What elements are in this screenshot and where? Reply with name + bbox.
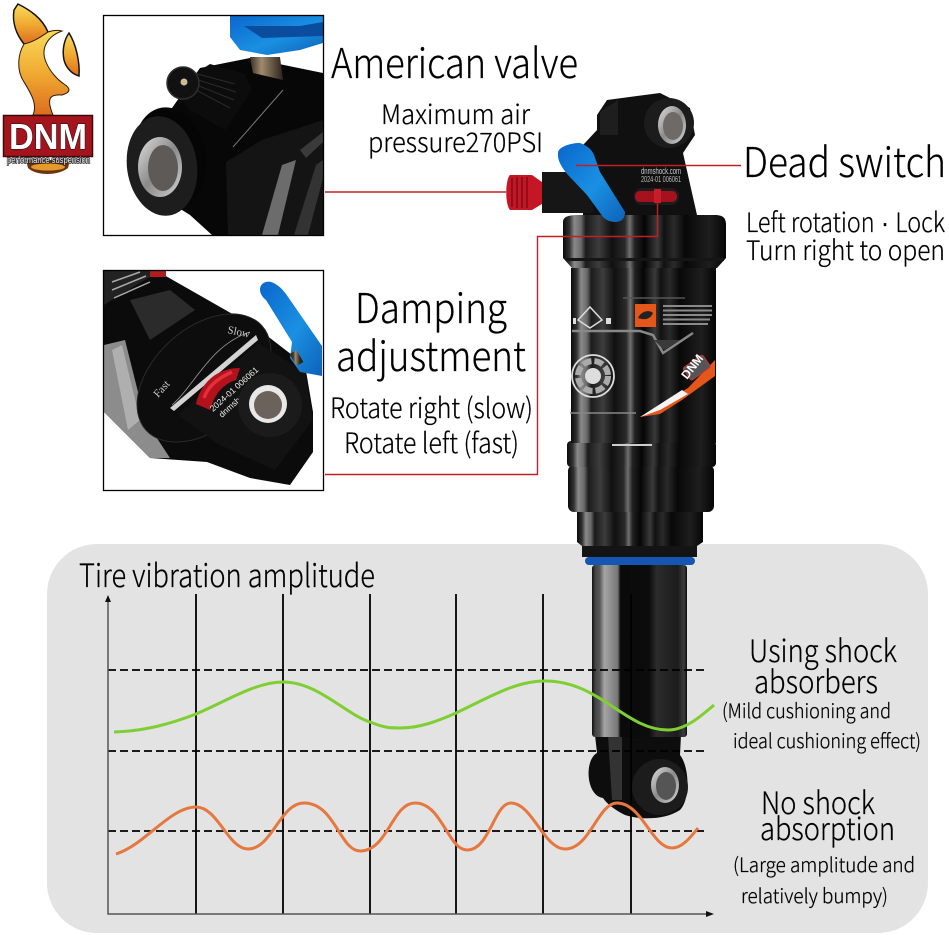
label graphics on can: DNM [678,352,706,382]
line: with shock absorbers [114,681,714,732]
panel: damping adjustment photo: Fast [151,378,173,400]
chart grid lines [108,594,707,914]
text: damping directions: Rotate left (fast) [344,422,519,462]
heading: no shock absorption [760,778,895,849]
text: mild cushioning: (Mild cushioning and [722,695,891,724]
text: lock directions: Left rotation · Lock [746,201,945,240]
lower eyelet [589,735,688,818]
text: air pressure: Maximum air [381,93,530,132]
panel: American valve photo [104,16,324,236]
logo: DNM performance suspension: DNM [9,116,87,157]
piston shaft [592,565,687,737]
chart: tire vibration amplitude [105,594,714,917]
heading: Damping adjustment: Damping [355,275,507,335]
text: large amplitude: relatively bumpy) [741,880,888,909]
red valve cap [506,175,542,210]
text: air pressure [368,93,543,160]
heading: tire vibration amplitude: Tire vibration amplitude [79,551,375,597]
panel: damping adjustment photo: Slow [226,324,251,341]
heading: American valve: American valve [331,30,578,90]
top mount: 2024-01 006061 [641,175,681,184]
text: large amplitude [733,849,915,909]
text: mild cushioning [722,695,921,754]
shock absorber [506,93,726,818]
text: lock directions [746,201,945,268]
chart axes [105,595,714,917]
panel: vibration chart background [47,544,928,933]
text: damping directions: Rotate right (slow) [330,387,533,427]
heading: Damping adjustment: adjustment [336,323,526,383]
heading: using shock absorbers: absorbers [754,657,878,702]
heading: Damping adjustment [336,275,526,383]
heading: using shock absorbers [749,626,897,702]
callout lines [325,166,741,474]
heading: no shock absorption: absorption [760,804,895,849]
heading: no shock absorption: No shock [761,778,875,823]
panel: damping adjustment photo: dnmshock.com [217,374,266,419]
blue lockout lever [558,143,625,222]
text: damping directions [330,387,533,462]
top mount [542,93,697,215]
panel: damping adjustment photo: 2024-01 006061 [208,364,261,413]
logo: DNM performance suspension: performance suspension [7,155,90,165]
text: large amplitude: (Large amplitude and [733,849,915,878]
panel: damping adjustment photo [104,270,324,490]
logo: DNM performance suspension [4,4,92,174]
top mount: dnmshock.com [641,166,681,177]
blue seal ring [585,557,695,565]
text: mild cushioning: ideal cushioning effect) [733,725,921,754]
label graphics on can [570,298,715,417]
heading: using shock absorbers: Using shock [749,626,897,671]
text: air pressure: pressure270PSI [368,121,543,160]
main air can [563,215,726,557]
red rebound knob [634,188,679,205]
line: no shock absorption [116,803,698,854]
